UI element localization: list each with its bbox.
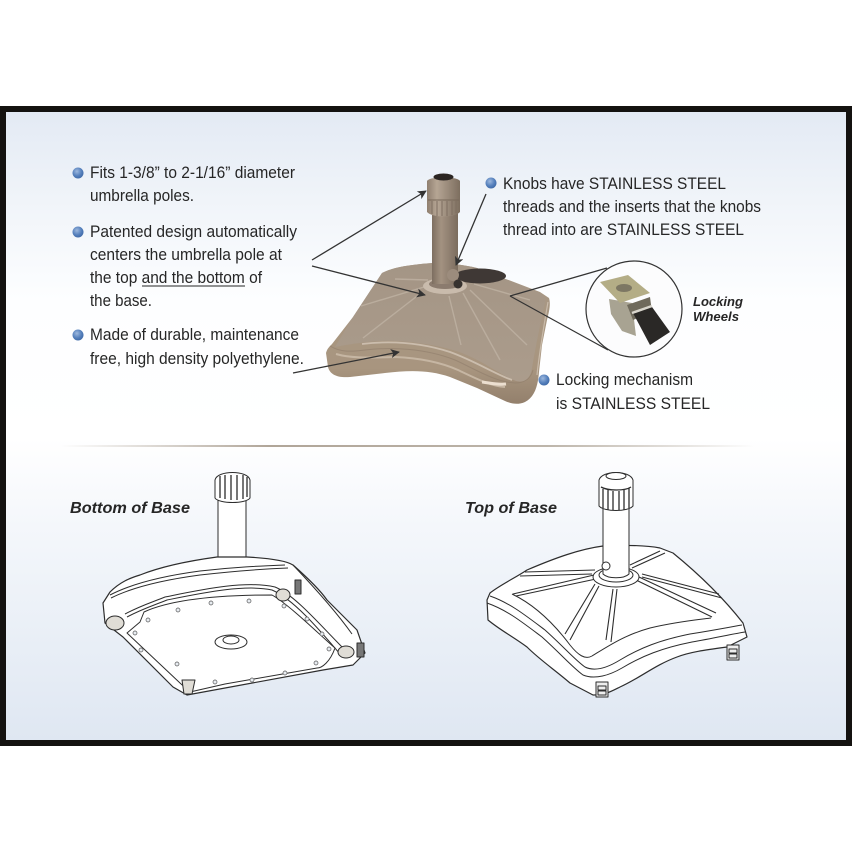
plate screw holes [133,599,331,684]
outer shell [103,557,365,695]
callout: locking wheel detail [510,261,743,357]
product photo: umbrella base [326,174,550,404]
bullet: locking mechanism: Locking mechanism [556,371,693,389]
locks [596,645,739,697]
base silhouette [326,263,550,404]
arrows to the photo [293,191,486,373]
bullet: pole diameter: Fits 1-3/8” to 2-1/16” diameter [90,164,295,182]
bullet: locking mechanism [538,371,710,413]
heading: top of base: Top of Base [465,500,557,517]
bullet: patented design: centers the umbrella pole at [90,246,282,264]
pole [603,505,629,578]
pole [218,500,246,560]
knob [599,472,633,510]
icon: caster wheel [600,275,670,345]
bullet: patented design: Patented design automatically [90,223,298,241]
bolt [602,562,610,570]
bullet: pole diameter: umbrella poles. [90,187,194,205]
divider [60,445,755,447]
wheels [106,589,354,694]
bullet: knobs [486,175,761,239]
collar ring [423,278,467,294]
knob [215,472,250,502]
base plate [127,595,335,692]
pole shadow [454,268,506,284]
rim lines [110,565,352,654]
bullet: patented design [72,223,298,310]
centre plate [215,635,247,649]
bullet: patented design: the top and the bottom of [90,269,262,287]
callout: locking wheel detail: Locking [693,294,743,309]
line drawing: bottom of base [103,472,365,695]
line drawing: top of base [487,472,747,697]
bullet: knobs: thread into are STAINLESS STEEL [503,221,744,239]
top ribs [361,279,530,360]
locks [295,580,364,657]
bolt knob [447,269,462,288]
bullet: polyethylene: free, high density polyethylene. [90,350,304,368]
base top face [335,263,545,382]
bullet: knobs: threads and the inserts that the knobs [503,198,761,216]
collar [593,567,639,587]
callout: locking wheel detail: Wheels [693,309,739,324]
bullet: locking mechanism: is STAINLESS STEEL [556,395,710,413]
bullet: polyethylene: Made of durable, maintenance [90,326,299,344]
pole [432,212,458,284]
top knob [427,174,460,216]
bullet: pole diameter [72,164,295,205]
bullet: knobs: Knobs have STAINLESS STEEL [503,175,726,193]
bullet: polyethylene [72,326,304,368]
shell [487,545,747,695]
background panel with black frame [0,106,852,746]
ribs [513,551,722,642]
bullet: patented design: the base. [90,292,152,310]
rim lines [487,594,745,677]
heading: bottom of base: Bottom of Base [70,500,190,517]
rim highlights [330,302,548,387]
